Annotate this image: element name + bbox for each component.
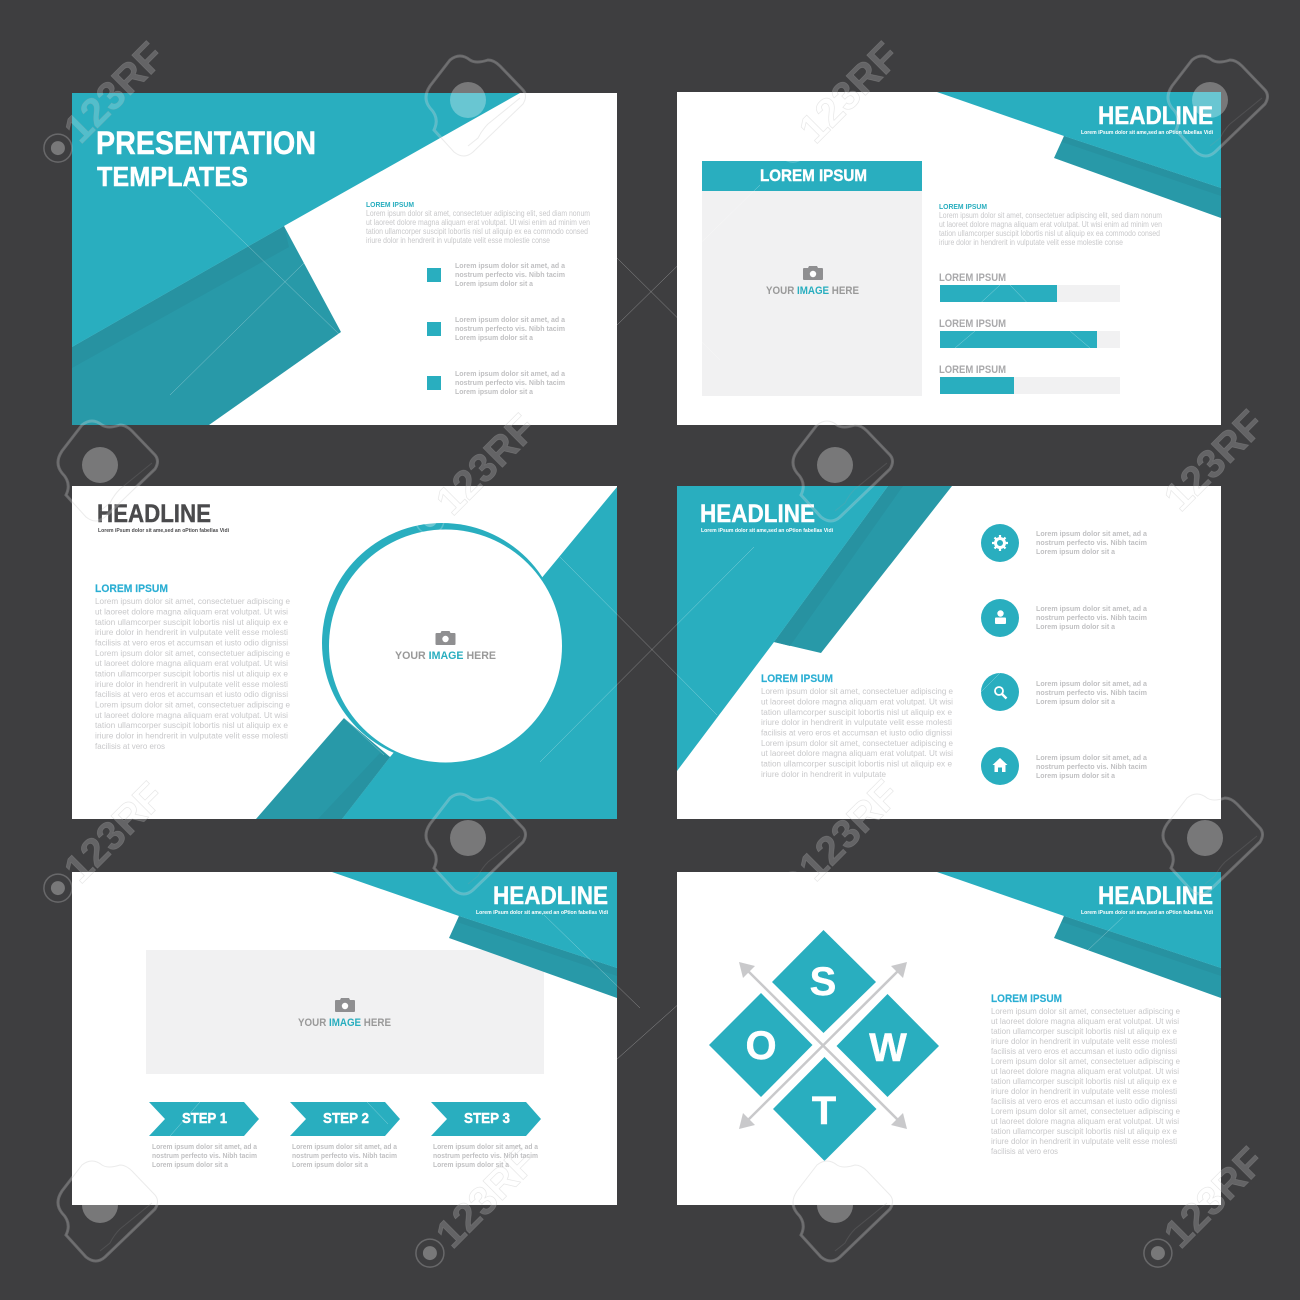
text block: tation ullamcorper suscipit lobortis nisl ut aliquip ex e bbox=[761, 708, 953, 717]
icon list text 3: Lorem ipsum dolor sit amet, ad a bbox=[1036, 679, 1148, 688]
icon list text 4: nostrum perfecto vis. Nibh tacim bbox=[1036, 762, 1147, 771]
cover intro text: tation ullamcorper suscipit lobortis nisl ut aliquip ex ea commodo consed bbox=[366, 227, 588, 236]
cover intro text bbox=[366, 200, 590, 245]
step 1 text bbox=[152, 1142, 258, 1169]
watermark: 123RF logos and camera marks: 123RF bbox=[1156, 1139, 1273, 1257]
text block: LOREM IPSUM bbox=[939, 202, 987, 211]
text block: tation ullamcorper suscipit lobortis nisl ut aliquip ex e bbox=[95, 721, 289, 730]
icon list text 2: nostrum perfecto vis. Nibh tacim bbox=[1036, 613, 1147, 622]
step 2 text bbox=[292, 1142, 398, 1169]
text block: tation ullamcorper suscipit lobortis nisl ut aliquip ex e bbox=[991, 1027, 1178, 1036]
icon list text 1: nostrum perfecto vis. Nibh tacim bbox=[1036, 538, 1147, 547]
crossed arrows bbox=[739, 962, 907, 1129]
bar chart: LOREM IPSUM bbox=[939, 318, 1006, 330]
diamond O bbox=[709, 993, 812, 1097]
cover bullet list: nostrum perfecto vis. Nibh tacim bbox=[455, 378, 565, 387]
SWOT diagram bbox=[709, 930, 939, 1161]
diamond T: T bbox=[812, 1089, 836, 1133]
teal shapes bbox=[677, 486, 952, 771]
step 2 text: Lorem ipsum dolor sit amet, ad a bbox=[292, 1142, 398, 1151]
text block bbox=[761, 673, 954, 779]
text block: Lorem ipsum dolor sit amet, consectetuer adipiscing e bbox=[95, 700, 291, 710]
text block: tation ullamcorper suscipit lobortis nisl ut aliquip ex e bbox=[95, 618, 289, 627]
arrow: step 1: STEP 1 bbox=[182, 1110, 227, 1127]
cover bullet list: nostrum perfecto vis. Nibh tacim bbox=[455, 324, 565, 333]
icon list text 4: Lorem ipsum dolor sit a bbox=[1036, 771, 1116, 780]
headline: Lorem iPsum dolor sit ame,sed an oPtion fabellas Vidi bbox=[701, 528, 833, 534]
step 2 text: nostrum perfecto vis. Nibh tacim bbox=[292, 1151, 397, 1160]
text block: tation ullamcorper suscipit lobortis nisl ut aliquip ex e bbox=[991, 1127, 1178, 1136]
corner shapes bbox=[332, 872, 617, 998]
cover title: PRESENTATION bbox=[96, 125, 316, 161]
text block: Lorem ipsum dolor sit amet, consectetuer adipiscing e bbox=[991, 1057, 1181, 1066]
text block: Lorem ipsum dolor sit amet, consectetuer adipiscing e bbox=[991, 1007, 1181, 1016]
headline: HEADLINE bbox=[97, 500, 211, 528]
headline: Lorem iPsum dolor sit ame,sed an oPtion fabellas Vidi bbox=[1081, 130, 1213, 136]
text block bbox=[991, 993, 1181, 1156]
text block: ut laoreet dolore magna aliquam erat volutpat. Ut wisi bbox=[95, 711, 288, 720]
headline: HEADLINE bbox=[1098, 102, 1213, 130]
corner shapes bbox=[937, 872, 1221, 998]
text block: facilisis at vero eros et accumsan et iusto odio dignissi bbox=[95, 690, 288, 699]
icon list text 1: Lorem ipsum dolor sit a bbox=[1036, 547, 1116, 556]
thin diagonal crossing lines bbox=[170, 185, 1123, 1136]
watermark: 123RF logos and camera marks: 123RF bbox=[791, 34, 908, 152]
headline: HEADLINE bbox=[493, 882, 608, 910]
text block: iriure dolor in hendrerit in vulputate velit esse molesti bbox=[991, 1137, 1177, 1146]
panel: steps slide bbox=[72, 872, 617, 1205]
corner shapes bbox=[937, 92, 1221, 218]
bar chart: LOREM IPSUM bbox=[939, 272, 1006, 284]
icon list text 2: Lorem ipsum dolor sit amet, ad a bbox=[1036, 604, 1148, 613]
icon list text 3 bbox=[1036, 679, 1148, 706]
step 3 text bbox=[433, 1142, 539, 1169]
cover bullet list: Lorem ipsum dolor sit amet, ad a bbox=[455, 315, 566, 324]
icon: person bbox=[981, 599, 1019, 637]
text block: facilisis at vero eros et accumsan et iusto odio dignissi bbox=[95, 638, 288, 648]
step 1 text: nostrum perfecto vis. Nibh tacim bbox=[152, 1151, 257, 1160]
step 2 text: Lorem ipsum dolor sit a bbox=[292, 1160, 369, 1169]
text block: Lorem ipsum dolor sit amet, consectetuer adipiscing e bbox=[991, 1107, 1181, 1116]
icon list text 1 bbox=[1036, 529, 1148, 556]
text block: ut laoreet dolore magna aliquam erat volutpat. Ut wisi bbox=[761, 698, 953, 706]
watermark: 123RF logos and camera marks: 123RF bbox=[791, 772, 908, 890]
headline: Lorem iPsum dolor sit ame,sed an oPtion fabellas Vidi bbox=[98, 528, 229, 534]
icon: magnifier bbox=[981, 673, 1019, 711]
icon list text 3: nostrum perfecto vis. Nibh tacim bbox=[1036, 688, 1147, 697]
watermark: 123RF logos and camera marks: 123RF bbox=[428, 406, 545, 524]
cover bullet list: Lorem ipsum dolor sit a bbox=[455, 279, 534, 288]
text block: ut laoreet dolore magna aliquam erat volutpat. Ut wisi bbox=[761, 749, 953, 758]
cover title: TEMPLATES bbox=[97, 161, 248, 192]
headline: HEADLINE bbox=[700, 500, 815, 528]
cover bullet list: Lorem ipsum dolor sit amet, ad a bbox=[455, 261, 566, 270]
watermark: 123RF logos and camera marks: 123RF bbox=[56, 774, 173, 892]
diamond T bbox=[773, 1057, 876, 1161]
headline bbox=[476, 882, 608, 916]
cover fold shadow band bbox=[72, 226, 289, 368]
cover intro text: LOREM IPSUM bbox=[366, 200, 414, 209]
text block: LOREM IPSUM bbox=[95, 583, 168, 595]
diamond S: S bbox=[810, 960, 836, 1004]
text block: ut laoreet dolore magna aliquam erat volutpat. Ut wisi bbox=[95, 659, 288, 668]
watermark: 123RF logos and camera marks: 123RF bbox=[1156, 402, 1273, 520]
text block: Lorem ipsum dolor sit amet, consectetuer adipiscing e bbox=[95, 597, 291, 606]
image card bbox=[702, 161, 922, 396]
text block: iriure dolor in hendrerit in vulputate velit esse molesti bbox=[991, 1087, 1177, 1096]
arrow: step 2: STEP 2 bbox=[323, 1110, 369, 1127]
text block: iriure dolor in hendrerit in vulputate velit esse molesti bbox=[95, 732, 288, 740]
text block: iriure dolor in hendrerit in vulputate velit esse molesti bbox=[95, 628, 288, 637]
text block: tation ullamcorper suscipit lobortis nisl ut aliquip ex e bbox=[95, 670, 289, 678]
diamond O: O bbox=[745, 1024, 777, 1068]
headline bbox=[1081, 882, 1213, 916]
image card: LOREM IPSUM bbox=[760, 166, 867, 185]
text block: facilisis at vero eros bbox=[95, 742, 165, 751]
text block: ut laoreet dolore magna aliquam erat volutpat. Ut wisi enim ad minim ven bbox=[939, 220, 1162, 229]
text block: LOREM IPSUM bbox=[991, 993, 1062, 1005]
text block: Lorem ipsum dolor sit amet, consectetuer adipiscing e bbox=[761, 739, 954, 748]
image placeholder bbox=[146, 950, 544, 1074]
cover intro text: ut laoreet dolore magna aliquam erat volutpat. Ut wisi enim ad minim ven bbox=[366, 218, 590, 227]
icon: gear bbox=[981, 524, 1019, 562]
text block bbox=[939, 202, 1162, 247]
text block: LOREM IPSUM bbox=[761, 673, 833, 685]
diamond W bbox=[836, 994, 939, 1097]
step 3 text: Lorem ipsum dolor sit amet, ad a bbox=[433, 1142, 539, 1151]
cover title bbox=[96, 125, 316, 192]
panel: image and progress bars slide bbox=[677, 92, 1221, 425]
text block: ut laoreet dolore magna aliquam erat volutpat. Ut wisi bbox=[991, 1067, 1179, 1076]
panel: cover slide bbox=[72, 93, 617, 425]
circle image placeholder bbox=[322, 523, 562, 763]
icon list text 1: Lorem ipsum dolor sit amet, ad a bbox=[1036, 529, 1148, 538]
cover dark fold shape bbox=[72, 226, 341, 425]
cover bullet list: Lorem ipsum dolor sit a bbox=[455, 333, 534, 342]
step 1 text: Lorem ipsum dolor sit a bbox=[152, 1160, 229, 1169]
icon list text 2: Lorem ipsum dolor sit a bbox=[1036, 622, 1116, 631]
step 3 text: Lorem ipsum dolor sit a bbox=[433, 1160, 510, 1169]
text block: Lorem ipsum dolor sit amet, consectetuer adipiscing elit, sed diam nonum bbox=[939, 211, 1162, 220]
text block: tation ullamcorper suscipit lobortis nisl ut aliquip ex ea commodo consed bbox=[939, 229, 1160, 238]
circle image placeholder: YOUR IMAGE HERE bbox=[395, 650, 496, 662]
text block bbox=[95, 583, 291, 751]
text block: Lorem ipsum dolor sit amet, consectetuer adipiscing e bbox=[761, 687, 954, 696]
text block: facilisis at vero eros et accumsan et iusto odio dignissi bbox=[991, 1047, 1177, 1056]
cover bullet list: Lorem ipsum dolor sit a bbox=[455, 387, 534, 396]
icon list text 4 bbox=[1036, 753, 1148, 780]
text block: iriure dolor in hendrerit in vulputate velit esse molesti bbox=[95, 680, 288, 689]
text block: ut laoreet dolore magna aliquam erat volutpat. Ut wisi bbox=[991, 1017, 1179, 1026]
image card: YOUR IMAGE HERE bbox=[766, 285, 859, 297]
headline: Lorem iPsum dolor sit ame,sed an oPtion fabellas Vidi bbox=[1081, 910, 1213, 916]
cover bullet list: Lorem ipsum dolor sit amet, ad a bbox=[455, 369, 566, 378]
cover teal shape bbox=[72, 93, 520, 347]
text block: ut laoreet dolore magna aliquam erat volutpat. Ut wisi bbox=[95, 608, 288, 616]
cover intro text: Lorem ipsum dolor sit amet, consectetuer adipiscing elit, sed diam nonum bbox=[366, 209, 590, 218]
text block: facilisis at vero eros bbox=[991, 1147, 1058, 1156]
text block: tation ullamcorper suscipit lobortis nisl ut aliquip ex e bbox=[761, 760, 953, 768]
arrow: step 3 bbox=[431, 1102, 541, 1136]
diamond W: W bbox=[869, 1026, 907, 1070]
step 3 text: nostrum perfecto vis. Nibh tacim bbox=[433, 1151, 538, 1160]
watermark: 123RF logos and camera marks: 123RF bbox=[428, 1139, 545, 1257]
arrow: step 1 bbox=[149, 1102, 259, 1136]
headline bbox=[1081, 102, 1213, 136]
icon: home bbox=[981, 747, 1019, 785]
arrow: step 2 bbox=[290, 1102, 400, 1136]
text block: iriure dolor in hendrerit in vulputate velit esse molesti bbox=[761, 718, 952, 727]
icon list text 2 bbox=[1036, 604, 1148, 631]
panel: SWOT slide bbox=[677, 872, 1221, 1205]
watermark: 123RF logos and camera marks: 123RF bbox=[56, 34, 173, 152]
bar chart: LOREM IPSUM bbox=[939, 364, 1006, 376]
headline: HEADLINE bbox=[1098, 882, 1213, 910]
diamond S bbox=[772, 930, 876, 1033]
text block: iriure dolor in hendrerit in vulputate velit esse molestie conse bbox=[939, 238, 1123, 247]
step 1 text: Lorem ipsum dolor sit amet, ad a bbox=[152, 1142, 258, 1151]
text block: facilisis at vero eros et accumsan et iusto odio dignissi bbox=[991, 1097, 1177, 1106]
text block: tation ullamcorper suscipit lobortis nisl ut aliquip ex e bbox=[991, 1077, 1178, 1086]
teal shapes bbox=[256, 487, 617, 819]
cover bullet list bbox=[427, 261, 566, 396]
image placeholder: YOUR IMAGE HERE bbox=[298, 1017, 391, 1029]
headline: Lorem iPsum dolor sit ame,sed an oPtion fabellas Vidi bbox=[476, 910, 608, 916]
arrow: step 3: STEP 3 bbox=[464, 1110, 510, 1127]
panel: icon list slide bbox=[677, 486, 1221, 819]
cover intro text: iriure dolor in hendrerit in vulputate velit esse molestie conse bbox=[366, 236, 550, 245]
icon list text 4: Lorem ipsum dolor sit amet, ad a bbox=[1036, 753, 1148, 762]
text block: facilisis at vero eros et accumsan et iusto odio dignissi bbox=[761, 728, 952, 738]
text block: iriure dolor in hendrerit in vulputate bbox=[761, 770, 887, 779]
text block: ut laoreet dolore magna aliquam erat volutpat. Ut wisi bbox=[991, 1117, 1179, 1126]
text block: iriure dolor in hendrerit in vulputate velit esse molesti bbox=[991, 1037, 1177, 1046]
text block: Lorem ipsum dolor sit amet, consectetuer adipiscing e bbox=[95, 649, 291, 658]
bar chart bbox=[939, 272, 1120, 394]
cover bullet list: nostrum perfecto vis. Nibh tacim bbox=[455, 270, 565, 279]
panel: circle image slide bbox=[72, 486, 617, 819]
icon list text 3: Lorem ipsum dolor sit a bbox=[1036, 697, 1116, 706]
